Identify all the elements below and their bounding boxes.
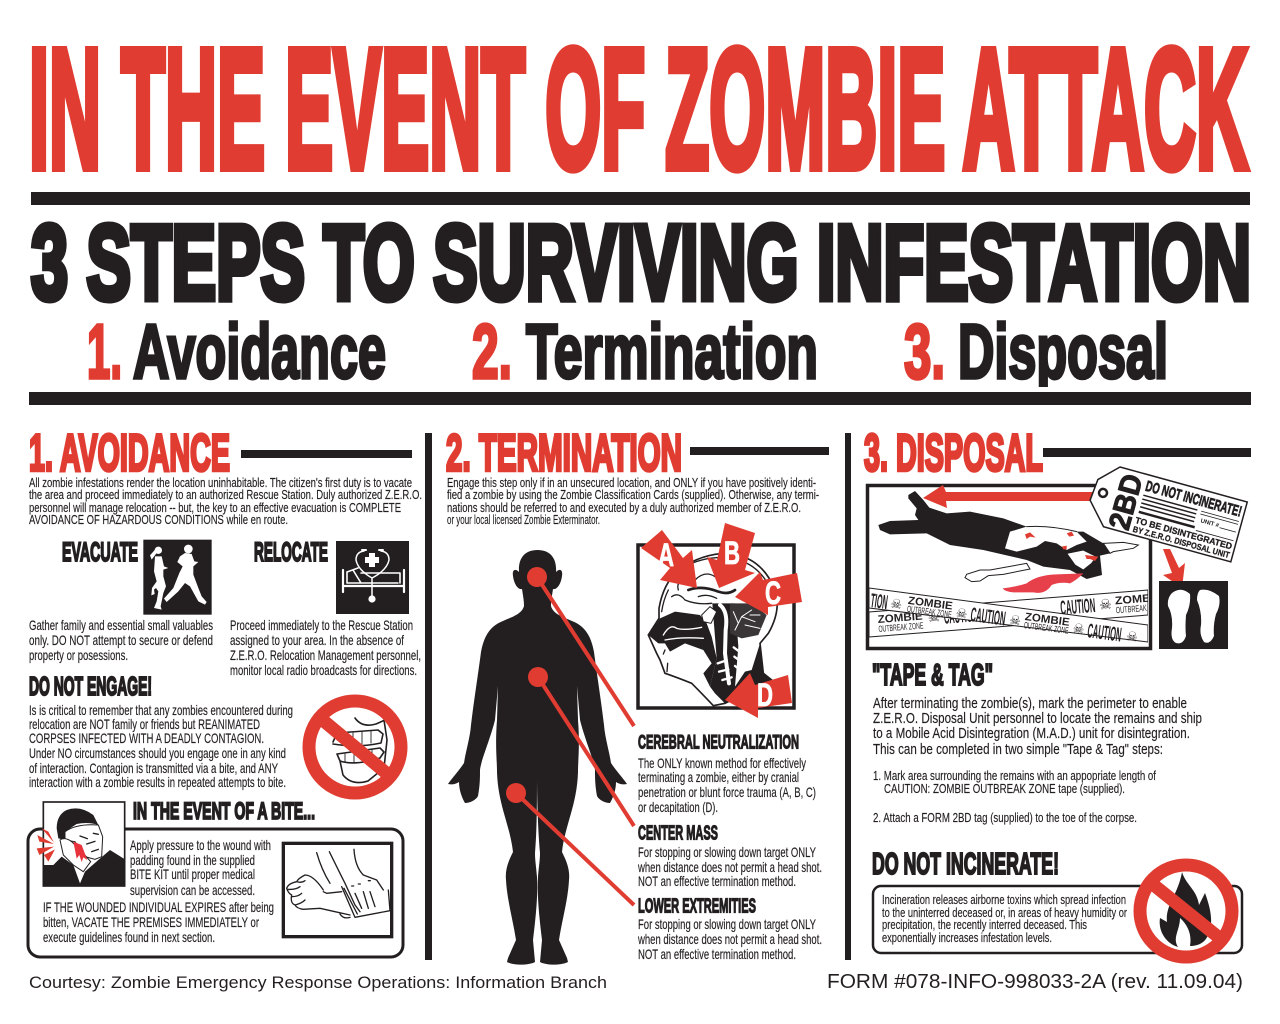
tape and tag text: Z.E.R.O. Disposal Unit personnel to locate the remains and ship (873, 711, 1202, 727)
evacuate text: property or posessions. (29, 648, 128, 663)
caution tape: ☠ (927, 609, 941, 626)
corpse (878, 491, 1138, 593)
panel: termination (446, 424, 829, 965)
center mass block (637, 822, 822, 889)
evacuate text (29, 618, 213, 663)
head cross section (648, 553, 777, 706)
caution tape: ☠ (1072, 621, 1085, 638)
caution tape: TION (869, 590, 889, 614)
bite text: IF THE WOUNDED INDIVIDUAL EXPIRES after being (43, 900, 274, 915)
callout: incineration warning: Incineration releases airborne toxins which spread infection (882, 892, 1126, 907)
caution tape: CAUTION (1086, 620, 1123, 647)
caution tape: ☠ (955, 606, 968, 623)
cerebral neutralization block: or decapitation (D). (638, 800, 718, 815)
cerebral neutralization block: The ONLY known method for effectively (638, 756, 806, 771)
bite text: bitten, VACATE THE PREMISES IMMEDIATELY or (43, 915, 259, 930)
heading: 1. avoidance: 1. AVOIDANCE (29, 424, 230, 482)
heading: do not engage: DO NOT ENGAGE! (29, 671, 152, 701)
heading: do not incinerate: DO NOT INCINERATE! (872, 846, 1059, 881)
caution tape: ☠ (1125, 629, 1139, 646)
cerebral neutralization block (638, 732, 816, 815)
caution tape: CAUTION (969, 604, 1007, 630)
lower extremities block (637, 896, 822, 962)
caution tape: ☠ (889, 597, 903, 613)
callout: incineration warning: exponentially increases infestation levels. (882, 930, 1052, 945)
intro text (29, 475, 422, 527)
target line: center mass (528, 667, 634, 826)
heading: 3. disposal: 3. DISPOSAL (864, 424, 1043, 482)
icon: no biting sign (309, 701, 401, 793)
do not engage text: relocation are NOT family or friends but REANIMATED (29, 717, 260, 732)
arrow B: B (724, 535, 740, 571)
tag: form 2BD: 2BD (1103, 471, 1150, 533)
caution tape: ZOMBIE (907, 595, 953, 613)
tape and tag text: This can be completed in two simple "Tape & Tag" steps: (873, 742, 1163, 758)
lower extremities block: when distance does not permit a head shot. (637, 932, 822, 947)
center mass block: For stopping or slowing down target ONLY (638, 845, 816, 860)
icon: hospital bed (336, 541, 409, 614)
steps list (873, 768, 1156, 825)
relocate text: Z.E.R.O. Relocation Management personnel, (230, 648, 421, 663)
intro text: personnel will manage relocation -- but, the key to an effective evacuation is COMPLETE (29, 500, 401, 515)
do not engage text (29, 703, 293, 790)
bite text: BITE KIT until proper medical (130, 867, 255, 882)
termination intro text: nations should be referred to and executed by a duly authorized member of Z.E.R.O. (447, 500, 801, 515)
arrow D: D (757, 677, 773, 713)
step 1 label (88, 320, 386, 380)
bite text: padding found in the supplied (130, 853, 255, 868)
caution tape: ZOMBIE (1024, 611, 1070, 629)
center mass block: NOT an effective termination method. (638, 874, 796, 889)
termination intro text: or your local licensed Zombie Exterminator. (447, 512, 600, 527)
caution tape: CAUTION (1060, 595, 1096, 620)
callout: incineration warning: precipitation, the recently interred deceased. This (882, 917, 1087, 932)
tag: form 2BD: BY Z.E.R.O. DISPOSAL UNIT (1132, 524, 1231, 560)
steps summary row (88, 320, 1166, 387)
step 2 label (472, 320, 816, 380)
intro text: the area and proceed immediately to an authorized Rescue Station. Duly authorized Z.E.R.O. (29, 487, 422, 502)
heading: tape and tag: "TAPE & TAG" (872, 657, 993, 692)
caution tape: ZOMBIE (877, 610, 923, 626)
illustration: applying pressure (283, 843, 392, 937)
tag: form 2BD (1084, 462, 1247, 562)
callout: incineration warning (873, 886, 1242, 953)
cerebral neutralization block: terminating a zombie, either by cranial (638, 770, 799, 785)
step 1 label: Avoidance (133, 309, 386, 395)
lower extremities block: NOT an effective termination method. (638, 947, 796, 962)
icon: runners (143, 540, 212, 615)
arrow A: A (658, 537, 674, 573)
arrow A (641, 530, 697, 588)
tag: form 2BD: TO BE DISINTEGRATED (1134, 515, 1234, 552)
lower extremities block: For stopping or slowing down target ONLY (638, 917, 816, 932)
tape and tag text: to a Mobile Acid Disintegration (M.A.D.) unit for disintegration. (873, 726, 1190, 742)
arrow: tag to toe (923, 485, 1095, 508)
heading: relocate: RELOCATE (254, 537, 328, 567)
illustration: body silhouette with target zones (448, 550, 634, 965)
cerebral neutralization block: CEREBRAL NEUTRALIZATION (638, 732, 799, 754)
steps list: CAUTION: ZOMBIE OUTBREAK ZONE tape (supplied). (884, 781, 1125, 796)
termination intro text (447, 475, 819, 527)
do not engage text: Is is critical to remember that any zombies encountered during (29, 703, 293, 718)
center mass block: CENTER MASS (638, 822, 718, 844)
caution tape: CAUTION (943, 604, 979, 629)
do not engage text: interaction with a zombie results in repeated attempts to bite. (29, 775, 286, 790)
step 3 label: 3. (904, 309, 945, 395)
step 3 label: Disposal (958, 309, 1168, 395)
caution tape: ☠ (1008, 613, 1022, 629)
do not engage text: Under NO circumstances should you engage one in any kind (29, 746, 286, 761)
arrow: tag to foot (1163, 549, 1185, 588)
step 1 label: 1. (87, 309, 122, 395)
icon: feet (1159, 581, 1228, 649)
caution tape: OUTBREAK ZONE (906, 604, 952, 620)
steps list: 2. Attach a FORM 2BD tag (supplied) to the toe of the corpse. (873, 810, 1137, 825)
evacuate text: only. DO NOT attempt to secure or defend (29, 633, 213, 648)
heading: in the event of a bite: IN THE EVENT OF A BITE... (133, 798, 315, 825)
step 2 label: Termination (526, 309, 818, 395)
target line: legs (506, 783, 634, 905)
relocate text: Proceed immediately to the Rescue Station (230, 618, 413, 633)
caution tape: ZOMB (1115, 593, 1151, 607)
bite text: Apply pressure to the wound with (130, 838, 271, 853)
tag: form 2BD: UNIT # (1200, 518, 1220, 529)
caution tape: OUTBREAK Z (1115, 602, 1152, 615)
panel: avoidance (28, 424, 422, 957)
illustration: bitten man (37, 802, 125, 886)
footer: form number: FORM #078-INFO-998033-2A (rev. 11.09.04) (827, 971, 1243, 993)
step 2 label: 2. (472, 309, 512, 395)
footer: courtesy: Courtesy: Zombie Emergency Response Operations: Information Branch (29, 973, 607, 992)
caution tape: OUTBREAK ZONE (1023, 620, 1069, 636)
cerebral neutralization block: penetration or blunt force trauma (A, B, C) (638, 785, 816, 800)
illustration: head cross section with arrows (638, 523, 802, 718)
icon: no fire sign (1140, 865, 1232, 957)
termination intro text: Engage this step only if in an unsecured location, and ONLY if you have positively identi- (447, 475, 816, 490)
caution tape: OUTBREAK ZONE (878, 620, 924, 634)
termination intro text: fied a zombie by using the Zombie Classification Cards (supplied). Otherwise, any termi- (447, 487, 819, 502)
lower extremities block: LOWER EXTREMITIES (638, 896, 756, 918)
tape and tag text: After terminating the zombie(s), mark the perimeter to enable (873, 696, 1187, 712)
center mass block: when distance does not permit a head shot. (637, 860, 822, 875)
caution tape (869, 588, 1148, 642)
callout: incineration warning: to the uninterred deceased or, in areas of heavy humidity or (882, 905, 1127, 920)
do not engage text: CORPSES INFECTED WITH A DEADLY CONTAGION. (29, 731, 264, 746)
target line: head (527, 567, 634, 726)
steps list: 1. Mark area surrounding the remains with an appopriate length of (873, 768, 1156, 783)
panel: disposal (864, 424, 1251, 957)
bite text: supervision can be accessed. (130, 883, 255, 898)
callout: bite instructions (28, 802, 403, 957)
arrow C (735, 572, 802, 615)
do not engage text: of interaction. Contagion is transmitted via a bite, and ANY (29, 761, 278, 776)
heading: 2. termination: 2. TERMINATION (446, 424, 682, 482)
caution tape: ☠ (1099, 597, 1112, 614)
arrow B (707, 523, 755, 588)
intro text: AVOIDANCE OF HAZARDOUS CONDITIONS while en route. (29, 512, 288, 527)
step 3 label (904, 320, 1166, 387)
relocate text (230, 618, 421, 678)
relocate text: assigned to your area. In the absence of (230, 633, 404, 648)
tape and tag text (873, 696, 1202, 758)
relocate text: monitor local radio broadcasts for directions. (230, 663, 417, 678)
intro text: All zombie infestations render the location uninhabitable. The citizen's first duty is to vacate (29, 475, 412, 490)
heading: evacuate: EVACUATE (62, 537, 138, 567)
arrow C: C (765, 575, 781, 611)
evacuate text: Gather family and essential small valuables (29, 618, 213, 633)
illustration: corpse scene (868, 486, 1152, 649)
bite text (43, 838, 274, 945)
arrow D (725, 673, 792, 718)
bite text: execute guidelines found in next section. (43, 930, 215, 945)
